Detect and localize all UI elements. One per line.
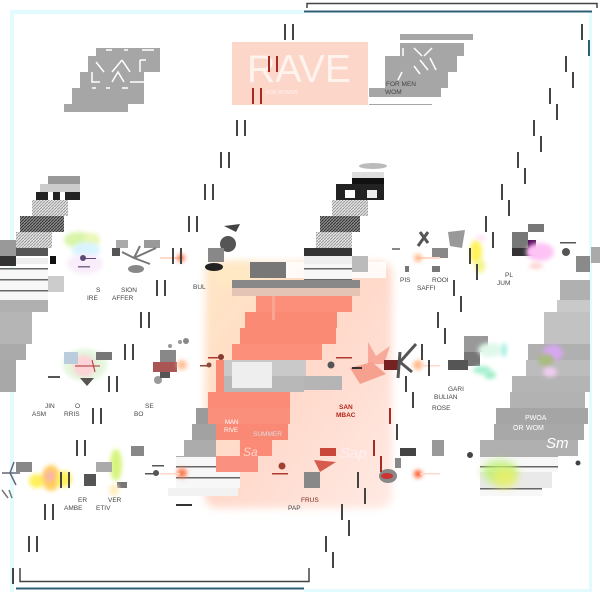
ingredient icon: cherry <box>205 224 240 271</box>
ingredient icon: pistachio <box>405 230 465 272</box>
right logo <box>369 34 473 105</box>
note labels: PIS <box>400 277 411 284</box>
note labels: VER <box>108 497 122 504</box>
note labels: BO <box>134 411 143 418</box>
note labels: ROSE <box>432 405 451 412</box>
ingredient icon: plant <box>112 240 160 273</box>
center logo <box>232 42 368 105</box>
note labels: SE <box>145 403 154 410</box>
note connector dots and lines <box>145 248 580 478</box>
note labels: ETIV <box>96 505 111 512</box>
center bottle: RIVE <box>224 428 238 434</box>
center bottle: Sap <box>340 445 367 462</box>
note labels: GARI <box>448 386 464 393</box>
ingredient icon: saffron <box>64 232 103 274</box>
ingredient icon: bergamot flowers <box>350 342 416 384</box>
note labels: AFFER <box>112 295 134 302</box>
note labels: ROOI <box>432 277 449 284</box>
left logo <box>64 48 160 112</box>
ingredient icon: palm leaves <box>304 448 336 488</box>
ingredient icon: amber spikes <box>2 462 32 498</box>
note labels: SAFFI <box>417 285 436 292</box>
note labels: JUM <box>497 280 510 287</box>
note labels: BUL <box>193 284 206 291</box>
note labels: PAP <box>288 505 301 512</box>
right logo: WOM <box>385 89 402 96</box>
note labels: BULIAN <box>434 394 458 401</box>
right bottle: WOM <box>526 425 544 432</box>
ingredient icon: iris rose leaves <box>153 338 189 384</box>
center bottle: MBAC <box>336 412 356 419</box>
note labels: JIN <box>45 403 55 410</box>
diagonal lines, right <box>325 24 590 568</box>
center logo: FOR WOMEN <box>266 90 298 96</box>
note labels: IRE <box>87 295 98 302</box>
ingredient icon: lemon <box>470 235 486 273</box>
ingredient icon: vetiver <box>84 446 144 496</box>
ingredient icon: jasmine rose <box>48 349 112 386</box>
note labels: FRUS <box>301 497 319 504</box>
diagonal double lines, left <box>12 24 294 584</box>
center bottle <box>168 262 392 508</box>
note labels: AMBE <box>64 505 83 512</box>
note labels: ER <box>78 497 87 504</box>
right bottle: Sm <box>546 435 568 452</box>
center logo: RAVE <box>247 48 351 91</box>
ingredient icon: grapefruit <box>29 465 72 491</box>
left logo: RAVE <box>90 70 125 85</box>
left logo: RAVE <box>95 59 135 76</box>
top cap of center bottle <box>304 163 387 280</box>
left bottle <box>0 176 80 392</box>
note labels: RRIS <box>64 411 80 418</box>
center bottle: MAN <box>225 420 238 426</box>
note labels: ASM <box>32 411 46 418</box>
note labels <box>32 272 513 512</box>
right logo: FOR MEN <box>386 81 416 88</box>
right bottle: OR <box>513 425 524 432</box>
ingredient icon: violet flower <box>538 345 563 377</box>
ingredient icon: plum <box>512 224 576 269</box>
center bottle: SUMMER <box>253 431 282 438</box>
right bottle <box>480 247 600 496</box>
ingredient icon: papaya <box>379 440 444 483</box>
note labels: S <box>96 287 101 294</box>
center bottle: Sa <box>243 445 258 459</box>
right bottle: PWOA <box>525 415 547 422</box>
note labels: PL <box>505 272 513 279</box>
note labels: O <box>75 403 80 410</box>
note labels: SION <box>121 287 137 294</box>
center bottle: SAN <box>339 404 353 411</box>
ingredient icon: garden flowers <box>448 336 507 379</box>
